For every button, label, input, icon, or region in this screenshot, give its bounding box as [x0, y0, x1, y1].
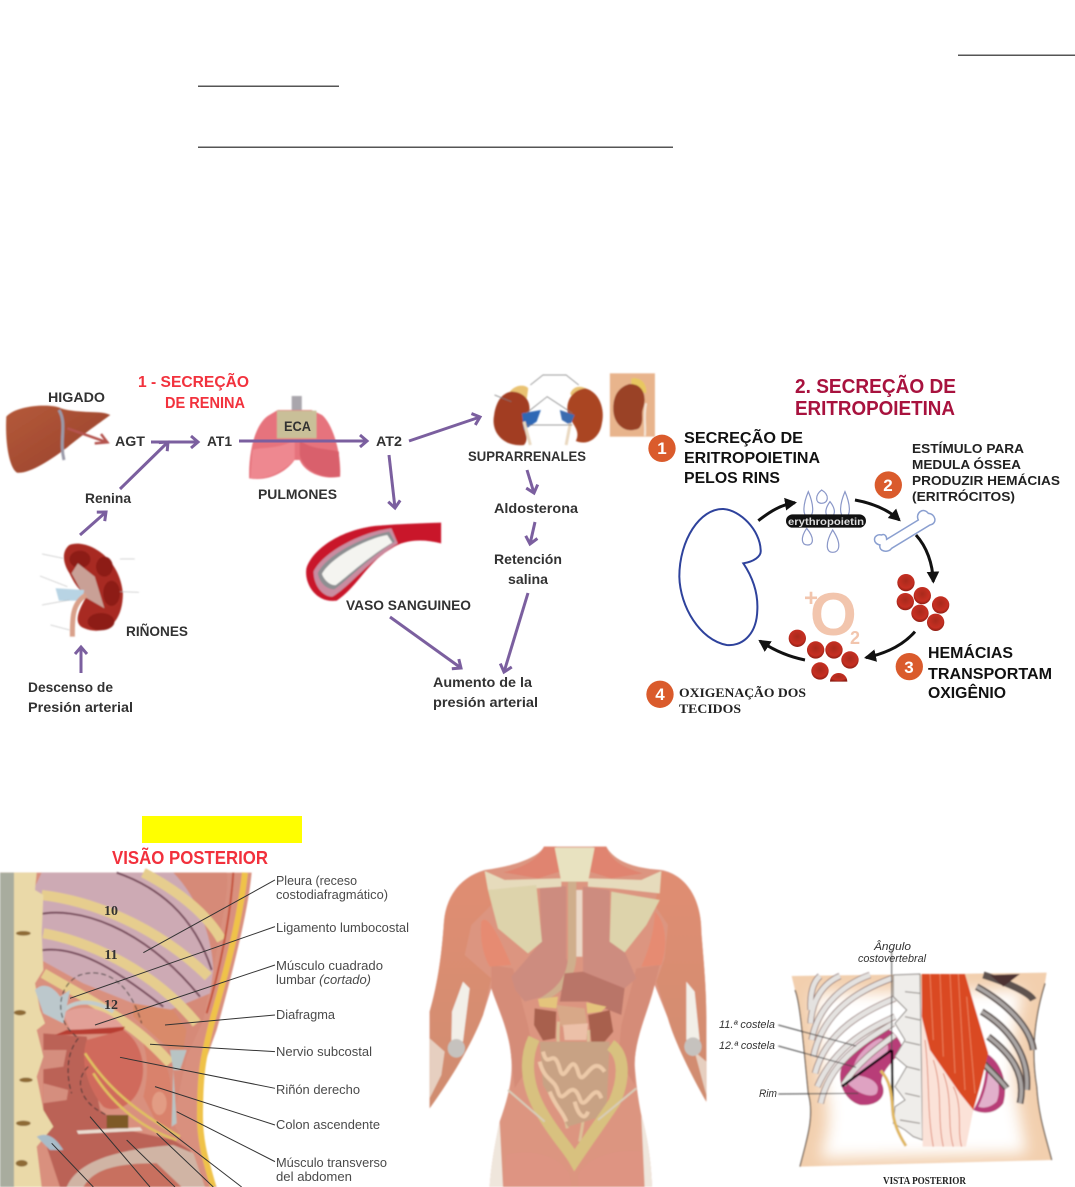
elbow joints	[448, 1039, 465, 1058]
liver and stomach	[556, 1005, 587, 1027]
glutes	[503, 1151, 643, 1187]
brown renal fat	[107, 1115, 128, 1128]
right kidney	[973, 1053, 1005, 1113]
anatomical labels: Pleura (receso	[276, 873, 357, 888]
leaders	[778, 1025, 858, 1094]
anatomical labels: Nervio subcostal	[276, 1044, 372, 1059]
forearm stripes	[430, 1038, 445, 1098]
panel: renin secretion diagram	[6, 371, 655, 715]
anatomical labels	[276, 873, 409, 1184]
shoulder muscles	[430, 872, 491, 1108]
cycle illustration	[646, 435, 949, 708]
trapezius	[503, 847, 643, 878]
muscular body silhouette	[430, 847, 706, 1187]
anatomical labels: Músculo transverso	[276, 1155, 387, 1170]
diagram labels: Descenso de	[28, 679, 113, 695]
ECA box	[277, 411, 317, 438]
position labels: Rim	[759, 1088, 777, 1100]
erythropoietin label: erythropoietin	[788, 516, 864, 528]
heading: renin secretion	[138, 371, 249, 412]
step 1 label	[684, 427, 820, 487]
oxygen symbol: +	[804, 585, 818, 612]
lower body side bands	[490, 1115, 652, 1187]
step 2 label: ESTÍMULO PARA	[912, 441, 1025, 456]
step 2 label	[912, 441, 1060, 504]
diagram labels: PULMONES	[258, 486, 337, 502]
anatomical labels: Ligamento lumbocostal	[276, 920, 409, 935]
step 1 label: PELOS RINS	[684, 470, 780, 487]
position labels: costovertebral	[858, 953, 927, 965]
heading: renin secretion: 1 - SECREÇÃO	[138, 371, 249, 391]
dashed kidney outline	[61, 973, 142, 1115]
deep muscle field	[43, 1033, 203, 1187]
diagram labels: AT2	[376, 433, 402, 449]
heading: renin secretion: DE RENINA	[165, 395, 245, 412]
clavicles and spine of scapula	[485, 871, 661, 893]
badge numbers: 3	[904, 658, 914, 677]
anatomical labels: del abdomen	[276, 1169, 352, 1184]
rib numbers	[104, 904, 118, 1013]
panel: torso with exposed organs	[430, 847, 706, 1187]
underlined blank lines	[198, 54, 1075, 148]
lats and deltoid rear	[481, 912, 665, 967]
angle marker lines	[842, 1050, 892, 1087]
heading: erythropoietin secretion: ERITROPOIETINA	[795, 398, 955, 420]
position labels: Ângulo	[873, 940, 911, 953]
subcostal nerves	[85, 1053, 180, 1140]
icon: adrenal glands and kidneys	[494, 375, 603, 445]
step 1 label: SECREÇÃO DE	[684, 427, 803, 447]
diagram labels: HIGADO	[48, 389, 105, 405]
step 3 label	[928, 643, 1052, 702]
icon: cut kidney	[40, 544, 139, 637]
heading: posterior view: VISÃO POSTERIOR	[112, 847, 268, 868]
diagram labels: presión arterial	[433, 694, 538, 710]
diagram labels: ECA	[284, 418, 311, 434]
diagram labels: VASO SANGUINEO	[346, 597, 471, 613]
step 3 label: OXIGÊNIO	[928, 683, 1006, 702]
highlighted yellow block	[142, 816, 302, 843]
badge numbers: 1	[657, 439, 667, 458]
anatomical labels: Músculo cuadrado	[276, 958, 383, 973]
pathway arrows	[80, 417, 535, 673]
small intestine loops	[540, 1052, 605, 1122]
pale fascia	[170, 1050, 187, 1127]
adrenal fat	[538, 997, 606, 1013]
position labels: 11.ª costela	[719, 1019, 775, 1031]
panel: erythropoietin secretion diagram	[646, 375, 1060, 716]
erythropoietin label pill	[786, 514, 866, 528]
diagram labels: AT1	[207, 433, 232, 449]
back muscle lower	[491, 965, 660, 1088]
icon: bone	[874, 511, 935, 551]
ribs	[42, 873, 222, 1063]
rib numbers: 11	[104, 948, 118, 963]
diagram labels: Aldosterona	[494, 500, 578, 516]
red blood cells	[789, 574, 949, 682]
step 3 label: HEMÁCIAS	[928, 643, 1013, 662]
heading: erythropoietin secretion	[795, 375, 956, 420]
scapulae	[488, 885, 660, 953]
anatomical labels: Colon ascendente	[276, 1117, 380, 1132]
anatomical illustrations	[6, 373, 655, 637]
pancreas	[563, 1023, 588, 1040]
badge numbers	[655, 439, 914, 704]
pleura	[35, 873, 213, 1010]
position labels	[719, 940, 927, 1100]
diagram labels: Retención	[494, 551, 562, 567]
spine	[893, 974, 923, 1140]
ureter	[881, 1071, 906, 1146]
step 1 label: ERITROPOIETINA	[684, 450, 820, 467]
diagram labels: Aumento de la	[433, 674, 532, 690]
step 4 label: TECIDOS	[679, 701, 741, 716]
spine strip	[0, 873, 14, 1187]
oxygen symbol: O	[810, 581, 857, 648]
diagram labels: AGT	[115, 433, 145, 449]
cervical spine	[555, 848, 595, 882]
anatomical labels: Riñón derecho	[276, 1082, 360, 1097]
heading: erythropoietin secretion: 2. SECREÇÃO DE	[795, 375, 956, 398]
lateral fat line	[200, 873, 245, 1187]
rib numbers: 10	[104, 904, 118, 919]
arm tendons	[451, 982, 700, 1042]
badge numbers: 2	[883, 476, 893, 495]
step 4 label	[679, 685, 806, 716]
panel: kidney anatomy, posterior dissection	[0, 873, 409, 1187]
diaphragm	[560, 972, 625, 1015]
diagram labels: Presión arterial	[28, 699, 133, 715]
colon	[528, 1038, 622, 1160]
torso outline	[792, 973, 1052, 1167]
outer muscle strip	[167, 873, 227, 1187]
caption: posterior view: VISTA POSTERIOR	[883, 1176, 967, 1187]
step 2 label: PRODUZIR HEMÁCIAS	[912, 473, 1060, 488]
aorta and spine	[540, 882, 576, 1002]
right kidney	[84, 1030, 143, 1109]
right ribs	[977, 975, 1033, 1103]
numbered badges	[646, 435, 923, 708]
vertebrae	[14, 873, 53, 1187]
step 2 label: MEDULA ÓSSEA	[912, 457, 1022, 472]
leader lines	[52, 880, 275, 1187]
diagram labels	[28, 389, 586, 715]
diagram labels: SUPRARRENALES	[468, 448, 586, 464]
diagram labels: RIÑONES	[126, 622, 188, 639]
anatomical labels: Diafragma	[276, 1007, 336, 1022]
anatomical labels: costodiafragmático)	[276, 887, 388, 902]
left ribs	[811, 975, 895, 1103]
colon	[143, 1043, 172, 1130]
erector muscle	[922, 974, 988, 1110]
diaphragm	[133, 1003, 187, 1050]
panel: kidney position in back	[719, 940, 1052, 1187]
cycle arrows	[758, 500, 933, 660]
pale peritoneum	[67, 1145, 205, 1187]
flank base	[0, 873, 252, 1187]
illustration: dissection	[0, 873, 252, 1187]
diagram labels: salina	[508, 571, 548, 587]
body contour	[795, 983, 1052, 1167]
hip ligaments	[508, 1088, 636, 1122]
badge numbers: 4	[655, 685, 665, 704]
kidneys	[534, 1008, 613, 1046]
lungs	[511, 882, 573, 1002]
lower back muscle	[922, 1017, 973, 1147]
rib numbers: 12	[104, 998, 118, 1013]
oxygen symbol: 2	[850, 628, 860, 648]
abdominal cavity	[540, 1042, 610, 1127]
anatomical labels: lumbar (cortado)	[276, 972, 371, 987]
icon: kidney photograph	[610, 373, 655, 437]
step 2 label: (ERITRÓCITOS)	[912, 489, 1015, 504]
position labels: 12.ª costela	[719, 1040, 775, 1052]
step 3 label: TRANSPORTAM	[928, 666, 1052, 683]
left kidney	[840, 1029, 903, 1105]
ureters	[558, 1022, 589, 1142]
icon: liver	[6, 406, 110, 473]
quadratus lumborum cut	[63, 1008, 123, 1033]
icon: lungs	[249, 396, 340, 479]
pale back highlight	[813, 990, 1027, 1158]
icon: kidney outline	[679, 509, 761, 645]
step 4 label: OXIGENAÇÃO DOS	[679, 685, 806, 700]
diagram labels: Renina	[85, 490, 131, 506]
icon: erythropoietin droplets	[802, 490, 849, 552]
icon: blood vessel	[306, 523, 441, 601]
